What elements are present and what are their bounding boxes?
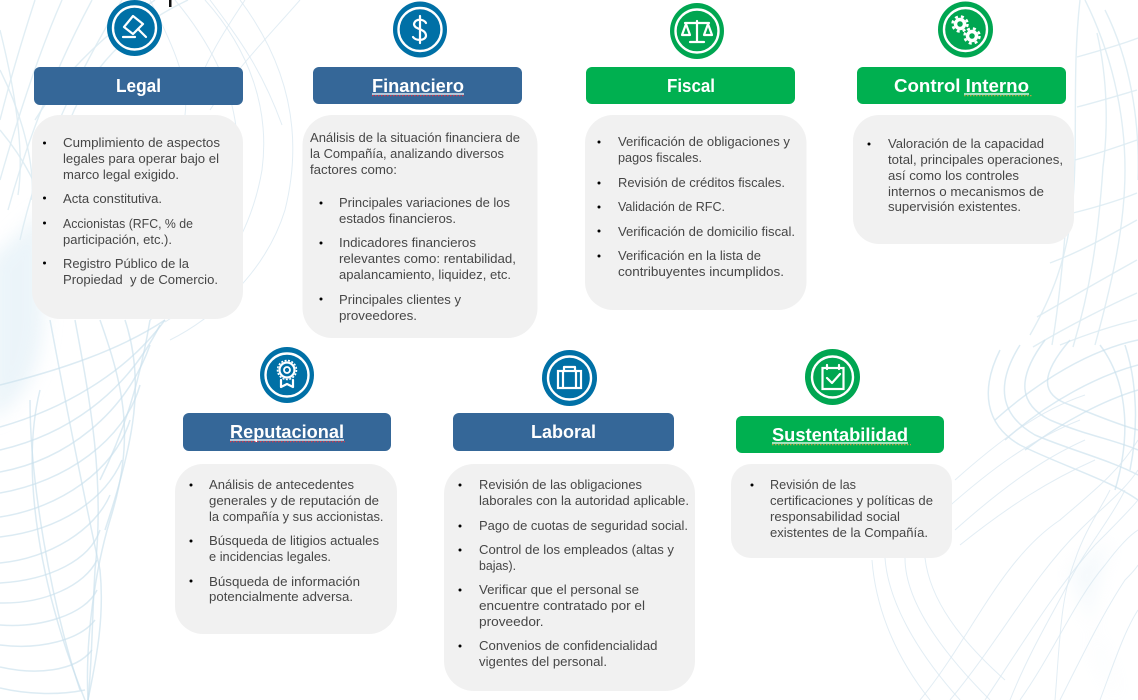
panel: Legal: participación, etc.). [63,232,172,247]
panel: Fiscal: contribuyentes incumplidos. [618,264,784,279]
panel: Fiscal: pagos fiscales. [618,150,702,165]
panel: Financiero: la Compañía, analizando diversos [310,146,504,161]
section: Reputacional [175,347,397,634]
panel: Fiscal: Revisión de créditos fiscales. [618,175,785,190]
panel: Laboral: Pago de cuotas de seguridad social. [479,518,688,533]
panel: Reputacional: Búsqueda de litigios actuales [209,533,380,548]
icon: dollar [393,2,447,58]
heading: Financiero [313,67,522,104]
heading: Legal [34,67,243,105]
panel: Control Interno: Valoración de la capacidad [888,136,1044,151]
panel: Reputacional [175,464,397,634]
panel: Financiero: proveedores. [339,308,417,323]
panel: Reputacional: la compañía y sus accionistas. [209,509,384,524]
heading: Sustentabilidad: Sustentabilidad [772,424,908,445]
panel: Laboral: proveedor. [479,614,544,629]
heading: Laboral [453,413,674,451]
panel: Reputacional: generales y de reputación de [209,493,379,508]
heading: Legal: Legal [116,75,161,96]
section: Financiero [302,2,538,338]
panel: Reputacional: Análisis de antecedentes [209,477,354,492]
panel: Legal: marco legal exigido. [63,167,179,182]
panel: Legal [32,115,243,319]
panel: Financiero: Indicadores financieros [339,235,476,250]
panel: Financiero [302,115,538,338]
icon: calendar check [805,349,860,405]
panel: Fiscal: Verificación en la lista de [618,248,761,263]
cropped title stroke [169,0,172,7]
panel: Control Interno: así como los controles [888,168,1019,183]
panel: Sustentabilidad: responsabilidad social [770,509,900,524]
section: Control Interno [853,2,1074,244]
panel: Financiero: factores como: [310,162,397,177]
heading: Financiero: Financiero [372,75,464,96]
panel: Financiero: Principales variaciones de los [339,195,510,210]
panel: Control Interno: supervisión existentes. [888,199,1021,214]
panel: Financiero: relevantes como: rentabilidad, [339,251,516,266]
panel: Legal: legales para operar bajo el [63,151,219,166]
icon: award ribbon [260,347,314,403]
panel: Sustentabilidad: certificaciones y políticas de [770,493,933,508]
heading: Laboral: Laboral [531,421,596,442]
section: Sustentabilidad [731,349,952,558]
panel: Financiero: Principales clientes y [339,292,461,307]
panel: Fiscal: Verificación de obligaciones y [618,134,790,149]
panel: Laboral: Control de los empleados (altas y [479,542,674,557]
section: Laboral [444,350,695,691]
panel: Laboral: Convenios de confidencialidad [479,638,658,653]
panel: Laboral: bajas). [479,558,516,573]
panel: Financiero: estados financieros. [339,211,456,226]
icon: gears [938,2,993,58]
panel: Legal: Acta constitutiva. [63,191,162,206]
panel: Legal: Propiedad y de Comercio. [63,272,218,287]
panel: Reputacional: Búsqueda de información [209,574,360,589]
panel: Legal: Accionistas (RFC, % de [63,216,193,231]
section: Legal [32,0,243,319]
icon: scales [670,3,724,59]
panel: Financiero: Análisis de la situación financiera de [310,130,520,145]
icon: briefcase [542,350,597,406]
heading: Reputacional [183,413,391,451]
panel: Fiscal [585,115,806,310]
heading: Control Interno: Control Interno [894,75,1029,96]
panel: Financiero: apalancamiento, liquidez, etc. [339,267,511,282]
panel: Laboral: vigentes del personal. [479,654,607,669]
heading: Control Interno [857,67,1066,104]
heading: Reputacional: Reputacional [230,421,344,442]
panel: Reputacional: potencialmente adversa. [209,589,353,604]
panel: Legal: Cumplimiento de aspectos [63,135,220,150]
panel: Sustentabilidad: Revisión de las [770,477,856,492]
panel: Laboral [444,464,695,691]
section: Fiscal [585,3,806,310]
panel: Control Interno [853,115,1074,244]
panel: Control Interno: total, principales operaciones, [888,152,1063,167]
heading: Fiscal: Fiscal [667,75,715,96]
heading: Sustentabilidad [736,416,944,453]
panel: Control Interno: internos o mecanismos de [888,184,1044,199]
panel: Laboral: encuentre contratado por el [479,598,645,613]
panel: Fiscal: Verificación de domicilio fiscal. [618,224,795,239]
heading: Fiscal [586,67,795,104]
panel: Laboral: Revisión de las obligaciones [479,477,642,492]
icon: gavel [107,0,162,56]
panel: Sustentabilidad [731,464,952,558]
panel: Legal: Registro Público de la [63,256,190,271]
panel: Fiscal: Validación de RFC. [618,199,725,214]
panel: Laboral: laborales con la autoridad aplicable. [479,493,689,508]
panel: Sustentabilidad: existentes de la Compañía. [770,525,928,540]
panel: Laboral: Verificar que el personal se [479,582,639,597]
panel: Reputacional: e incidencias legales. [209,549,331,564]
